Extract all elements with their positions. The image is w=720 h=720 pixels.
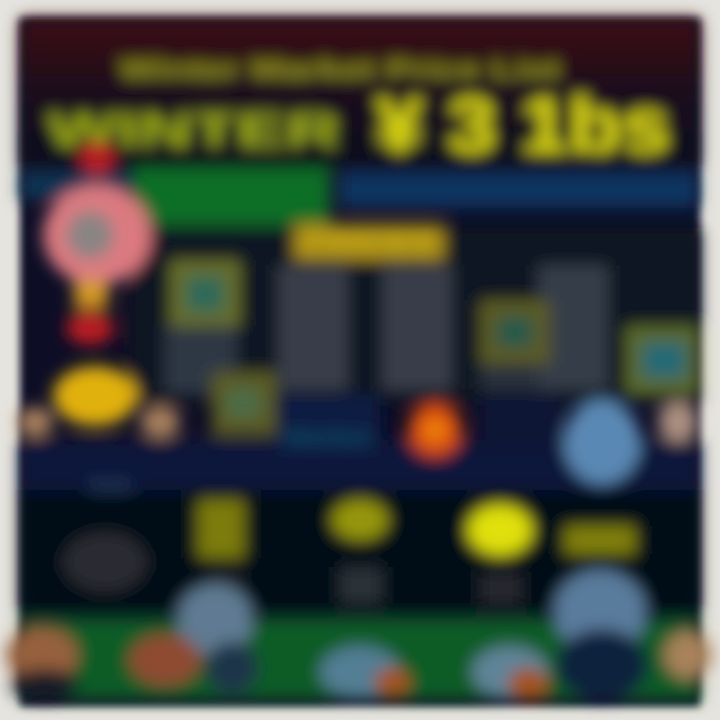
panel: green floor: [20, 618, 700, 700]
icon: box three: [626, 326, 700, 394]
icon: orange circle: [408, 403, 462, 457]
icon: ball group: [6, 570, 712, 701]
text: teal label: Market: [285, 427, 370, 449]
icon: blue globe: [564, 400, 698, 484]
icon: pink figure: [43, 141, 151, 345]
blue band: [20, 172, 698, 208]
icon: small box: [212, 372, 276, 436]
icon: yellow dome: [17, 366, 180, 438]
item two: [332, 500, 388, 603]
icon: box two: [480, 300, 550, 364]
subtitle: Winter Market Price List: [120, 54, 561, 84]
title right: ¥ 3 1bs: [375, 81, 670, 169]
icon: box one: [170, 260, 240, 326]
panel: product columns: [130, 228, 700, 403]
green band: [132, 168, 330, 226]
item three: [468, 505, 532, 604]
heading label: PRICES: [304, 230, 434, 255]
item one: [198, 500, 244, 600]
icon: grey dome: [63, 532, 147, 592]
heading label: [294, 224, 444, 260]
title left: WINTER: [48, 104, 340, 156]
item four: [565, 526, 635, 554]
panel: lower band: [20, 395, 700, 612]
text: small label: Sale: [88, 475, 133, 497]
header panel: [20, 18, 700, 169]
